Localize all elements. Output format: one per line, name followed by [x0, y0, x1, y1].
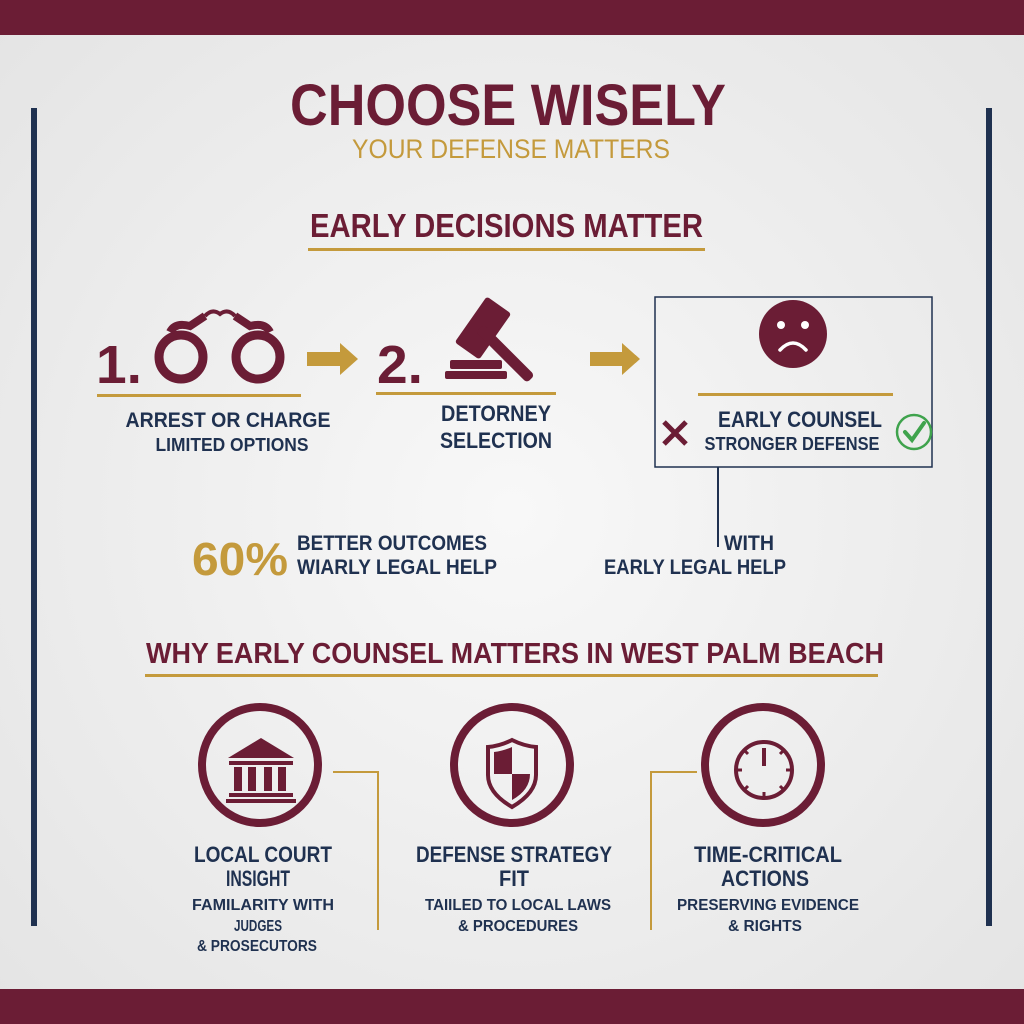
panel: local court insight — [192, 707, 334, 955]
panel: time-critical actions: ACTIONS — [721, 866, 809, 891]
bottom bar — [0, 989, 1024, 1024]
outcome box: STRONGER DEFENSE — [704, 434, 880, 454]
panel: time-critical actions: TIME-CRITICAL — [694, 842, 842, 867]
icon: x mark — [664, 422, 686, 444]
stat: 60%: 60% — [192, 533, 288, 585]
icon: handcuffs — [159, 311, 280, 379]
step 2: DETORNEY — [441, 401, 551, 426]
arrow 2 — [590, 343, 640, 375]
step 2: SELECTION — [440, 428, 552, 453]
gold bracket left — [333, 772, 378, 930]
panel: local court insight: JUDGES — [234, 918, 282, 935]
panel: defense strategy fit — [416, 707, 612, 935]
panel: time-critical actions: & RIGHTS — [728, 918, 802, 935]
panel: defense strategy fit: DEFENSE STRATEGY — [416, 842, 612, 867]
title: CHOOSE WISELY — [290, 73, 726, 138]
icon: stopwatch — [736, 742, 792, 798]
with early legal help — [604, 532, 786, 579]
subtitle: YOUR DEFENSE MATTERS — [352, 134, 670, 164]
icon: sad face — [759, 300, 827, 368]
panel: defense strategy fit: TAIILED TO LOCAL LAWS — [425, 897, 611, 914]
panel: defense strategy fit: FIT — [499, 866, 530, 891]
stat: 60%: BETTER OUTCOMES — [297, 532, 487, 555]
stat: 60%: WIARLY LEGAL HELP — [297, 556, 497, 579]
panel: time-critical actions — [677, 707, 859, 935]
panel: local court insight: INSIGHT — [226, 866, 290, 891]
arrow 1 — [307, 343, 358, 375]
step 1: LIMITED OPTIONS — [156, 435, 308, 455]
connector line — [717, 467, 719, 547]
top bar — [0, 0, 1024, 35]
outcome box: EARLY COUNSEL — [718, 407, 882, 432]
icon: check — [897, 415, 931, 449]
step 1: ARREST OR CHARGE — [126, 409, 330, 432]
step 1 — [96, 311, 330, 455]
right navy rule — [986, 108, 992, 926]
heading: why early counsel: WHY EARLY COUNSEL MATTERS IN WEST PALM BEACH — [146, 638, 884, 670]
left navy rule — [31, 108, 37, 926]
icon: gavel — [445, 296, 535, 383]
panel: local court insight: FAMILARITY WITH — [192, 897, 334, 914]
step 1: 1. — [96, 335, 142, 395]
step 2 — [376, 296, 556, 453]
outcome box — [655, 297, 932, 467]
panel: defense strategy fit: & PROCEDURES — [458, 918, 578, 935]
gold bracket right — [651, 772, 697, 930]
icon: shield — [488, 740, 536, 807]
panel: local court insight: LOCAL COURT — [194, 842, 332, 867]
stat: 60% — [192, 532, 497, 585]
with early legal help: WITH — [724, 532, 774, 555]
panel: local court insight: & PROSECUTORS — [197, 938, 317, 955]
panel: time-critical actions: PRESERVING EVIDENCE — [677, 897, 859, 914]
icon: courthouse — [226, 738, 296, 803]
heading: early decisions: EARLY DECISIONS MATTER — [310, 207, 703, 244]
step 2: 2. — [377, 335, 423, 395]
with early legal help: EARLY LEGAL HELP — [604, 556, 786, 579]
